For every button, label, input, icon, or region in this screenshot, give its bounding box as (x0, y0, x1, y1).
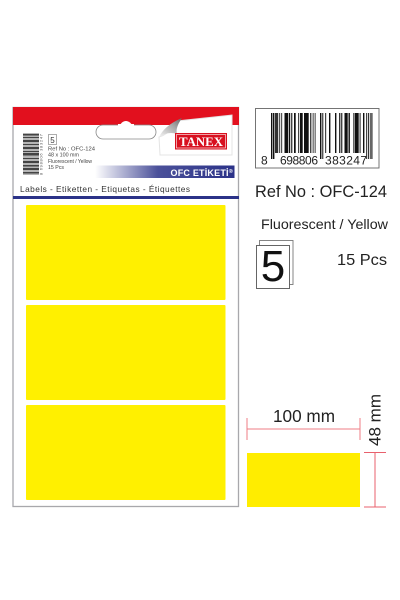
height dimension: 48 mm (366, 394, 384, 446)
width dimension: 100 mm (273, 406, 335, 426)
colour name: Fluorescent / Yellow (261, 216, 389, 232)
labels heading: Labels - Etiketten - Etiquetas - Étiquettes (20, 184, 190, 194)
barcode number: 8 (261, 154, 268, 168)
blue product banner: OFC ETİKETİ (171, 168, 229, 178)
curled corner flap (159, 115, 232, 155)
count box small: 5 (50, 136, 55, 145)
reference number: Ref No : OFC-124 (255, 183, 387, 201)
icon: pack count: 5 (261, 242, 285, 291)
yellow label 1 (26, 205, 226, 300)
blue rule (13, 196, 239, 199)
package product details: 48 x 100 mm (48, 152, 79, 158)
piece count: 15 Pcs (337, 252, 387, 269)
count box small (48, 134, 56, 145)
barcode number (261, 153, 367, 168)
package product details (48, 146, 95, 171)
red header band (13, 107, 239, 125)
height dimension (364, 394, 386, 507)
blue product banner (95, 166, 234, 178)
package product details: Ref No : OFC-124 (48, 146, 95, 152)
package product details: 15 Pcs (48, 165, 65, 171)
blue product banner: ® (229, 168, 233, 175)
yellow label 2 (26, 305, 226, 400)
yellow label 3 (26, 405, 226, 500)
logo: Tanex: TANEX (179, 134, 224, 149)
package product details: Fluorescent / Yellow (48, 159, 92, 165)
icon: pack count (256, 240, 293, 291)
hang hole tab (96, 121, 156, 139)
barcode panel (256, 108, 379, 168)
panel: product package (13, 107, 239, 506)
barcode number: 698806 (280, 154, 318, 168)
width dimension (247, 406, 360, 440)
barcode number: 383247 (325, 154, 367, 168)
small barcode (23, 133, 44, 175)
yellow sample label (247, 453, 360, 507)
small barcode: 8 698806 383247 (38, 133, 44, 175)
